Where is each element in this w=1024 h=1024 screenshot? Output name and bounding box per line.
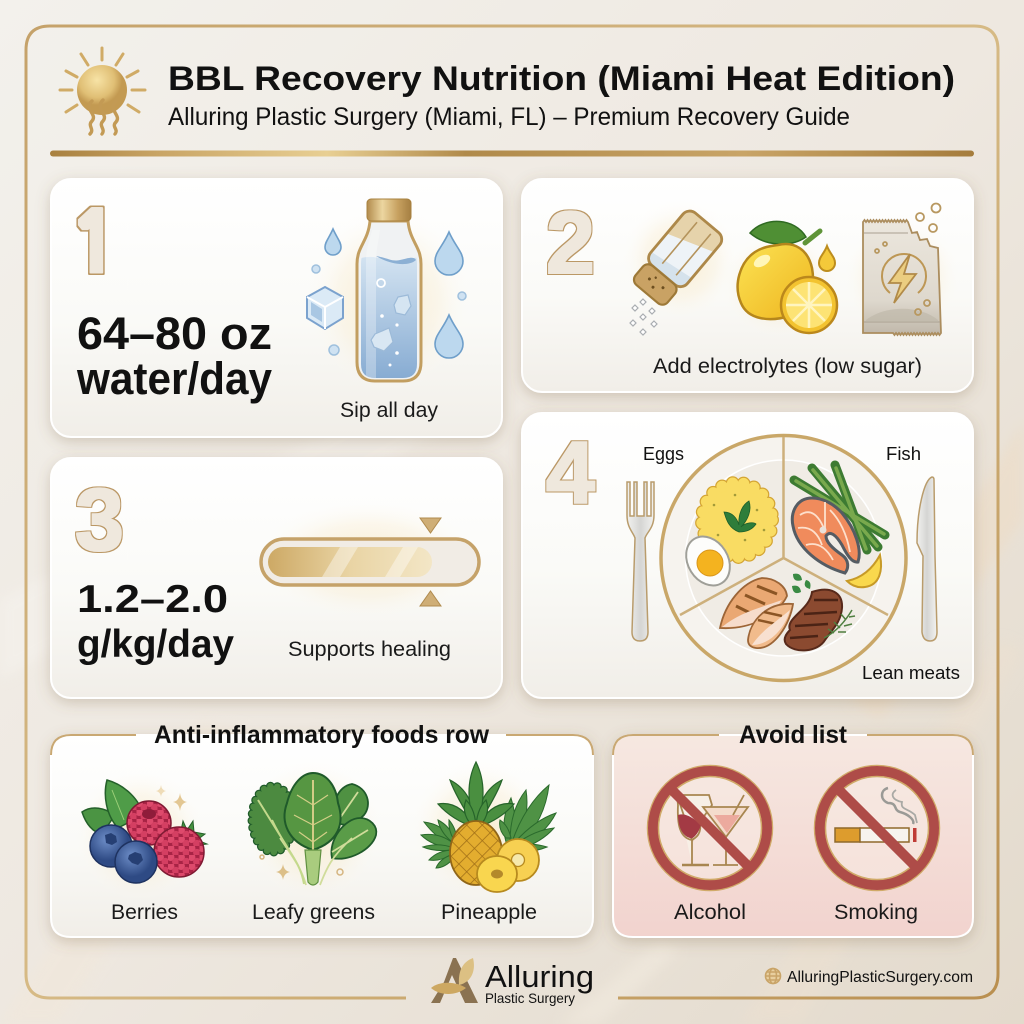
protein amount: 1.2–2.0 bbox=[77, 578, 228, 621]
icon: water bottle bbox=[306, 198, 467, 382]
icon: salt shaker bbox=[629, 210, 724, 336]
food: boiled egg bbox=[677, 528, 739, 594]
icon: logo A with leaf bbox=[431, 958, 478, 1003]
footer logo bbox=[431, 958, 594, 1006]
label: lean meats: Lean meats bbox=[862, 662, 960, 683]
number 4: 4 bbox=[546, 423, 595, 522]
panel: avoid list bbox=[613, 721, 973, 937]
icon: globe bbox=[766, 968, 780, 984]
caption: alcohol: Alcohol bbox=[674, 901, 746, 924]
heading: anti-inflammatory: Anti-inflammatory foods row bbox=[154, 721, 490, 749]
protein amount: g/kg/day bbox=[77, 623, 234, 666]
subtitle: Alluring Plastic Surgery (Miami, FL) – Premium Recovery Guide bbox=[168, 103, 850, 131]
panel: 2 electrolytes bbox=[522, 179, 973, 392]
caption: add electrolytes: Add electrolytes (low sugar) bbox=[653, 355, 922, 378]
brand name: Alluring bbox=[485, 959, 594, 994]
bubbles bbox=[312, 265, 466, 355]
number 1: 1 bbox=[70, 204, 119, 284]
caption: smoking: Smoking bbox=[834, 901, 918, 924]
icon: ice cube bbox=[307, 287, 343, 329]
caption: leafy greens: Leafy greens bbox=[252, 901, 375, 924]
water amount: 64–80 oz bbox=[77, 308, 272, 359]
icon: knife bbox=[917, 477, 937, 641]
panel: 1 water bbox=[51, 179, 502, 437]
caption: berries: Berries bbox=[111, 901, 178, 924]
icon: no smoking bbox=[814, 766, 940, 890]
icon: lemon bbox=[718, 221, 842, 340]
food: scrambled eggs bbox=[702, 483, 772, 557]
food: grilled chicken bbox=[720, 578, 793, 648]
icon: no alcohol bbox=[648, 766, 772, 890]
heading: avoid list: Avoid list bbox=[739, 721, 848, 749]
water amount: water/day bbox=[76, 353, 272, 404]
icon: berries bbox=[72, 767, 208, 903]
icon: divided plate bbox=[661, 436, 906, 680]
herbs: rosemary and parsley bbox=[792, 574, 855, 638]
brand tagline: Plastic Surgery bbox=[485, 990, 575, 1006]
number 3: 3 bbox=[75, 470, 124, 569]
panel: 3 protein bbox=[51, 458, 502, 698]
icon: leafy greens bbox=[241, 758, 385, 902]
panel: anti-inflammatory foods bbox=[51, 721, 593, 937]
icon: pineapple bbox=[408, 758, 556, 902]
title: BBL Recovery Nutrition (Miami Heat Edition) bbox=[168, 60, 955, 98]
gold divider bbox=[50, 150, 974, 156]
food: asparagus bbox=[794, 465, 885, 550]
caption: supports healing: Supports healing bbox=[288, 638, 451, 661]
label: eggs: Eggs bbox=[643, 443, 684, 464]
header bbox=[60, 48, 955, 134]
food: salmon bbox=[792, 498, 859, 573]
caption: sip all day: Sip all day bbox=[340, 399, 439, 422]
url: AlluringPlasticSurgery.com bbox=[787, 969, 973, 986]
icon: fork bbox=[627, 482, 654, 641]
water amount bbox=[76, 308, 272, 404]
food: steak bbox=[785, 590, 842, 650]
icon: water drops bbox=[325, 229, 463, 358]
icon: sun with heat waves bbox=[60, 48, 145, 134]
food: lemon wedge bbox=[847, 555, 881, 587]
label: fish: Fish bbox=[886, 443, 921, 464]
panel: 4 protein plate bbox=[522, 413, 973, 698]
progress bar gauge bbox=[253, 498, 483, 622]
caption: pineapple: Pineapple bbox=[441, 901, 537, 924]
number 2: 2 bbox=[546, 193, 595, 292]
protein amount bbox=[77, 578, 234, 666]
icon: electrolyte packet bbox=[842, 204, 962, 340]
website bbox=[766, 968, 973, 986]
